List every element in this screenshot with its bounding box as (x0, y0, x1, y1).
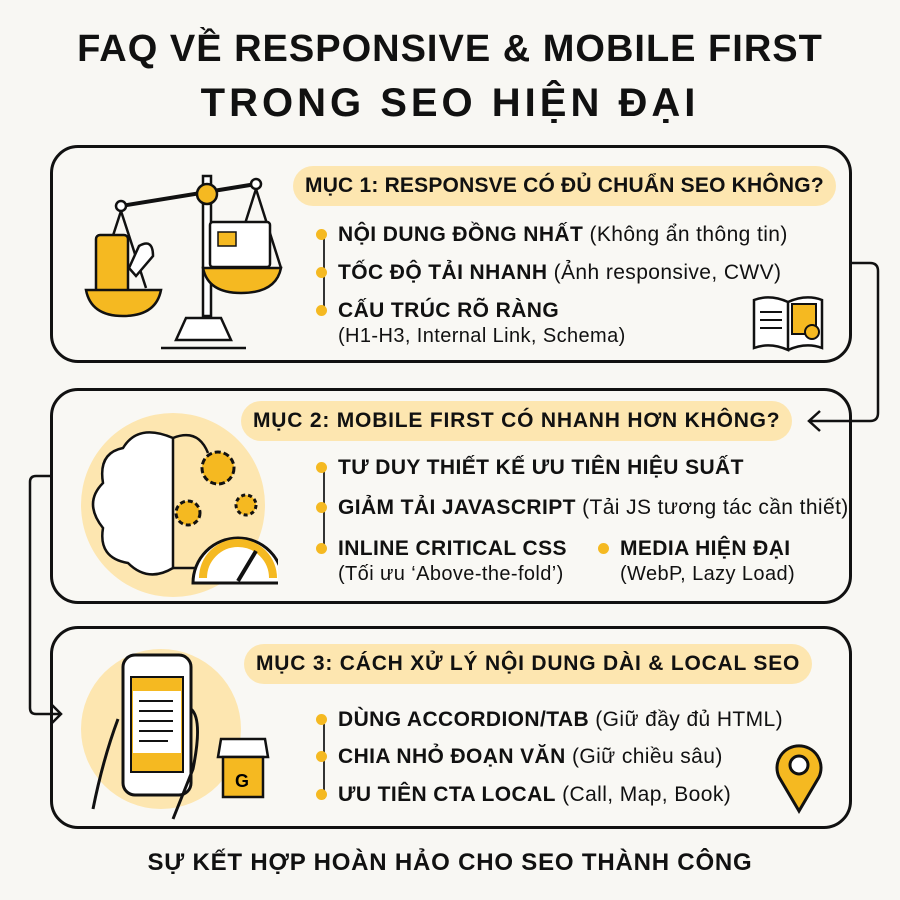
heading pill 2 (241, 401, 792, 441)
icon: map pin (776, 744, 822, 814)
icon: phone in hand with store (81, 649, 270, 820)
bullet 2.1: TƯ DUY THIẾT KẾ ƯU TIÊN HIỆU SUẤT (338, 456, 744, 479)
bullet 2.3 (316, 537, 567, 585)
arrow: panel 2 to panel 3 (28, 474, 63, 724)
icon: scale (84, 174, 282, 350)
panel: muc 2 (50, 388, 852, 604)
heading pill 1 (293, 166, 836, 206)
bullet 2.4: MEDIA HIỆN ĐẠI (620, 537, 790, 560)
bullet 1.3: (H1-H3, Internal Link, Schema) (338, 325, 626, 347)
panel: muc 3 (50, 626, 852, 829)
bullet 1.3: CẤU TRÚC RÕ RÀNG (338, 299, 559, 322)
bullet 2.4: (WebP, Lazy Load) (620, 563, 795, 585)
title: TRONG SEO HIỆN ĐẠI (201, 81, 699, 125)
bullet 1.3 (316, 298, 626, 347)
bullet 2.3: INLINE CRITICAL CSS (338, 537, 567, 560)
arrow: panel 1 to panel 2 (807, 262, 880, 432)
bullet 1.2: TỐC ĐỘ TẢI NHANH (Ảnh responsive, CWV) (338, 261, 781, 284)
heading pill 2: MỤC 2: MOBILE FIRST CÓ NHANH HƠN KHÔNG? (253, 409, 780, 432)
bullet 1.1: NỘI DUNG ĐỒNG NHẤT (Không ẩn thông tin) (338, 223, 788, 246)
title: FAQ VỀ RESPONSIVE & MOBILE FIRST (77, 28, 823, 70)
heading pill 3 (244, 644, 812, 684)
title (77, 27, 823, 125)
icon: book (752, 296, 824, 352)
bullet 3.3: ƯU TIÊN CTA LOCAL (Call, Map, Book) (338, 783, 731, 806)
bullet 3.2: CHIA NHỎ ĐOẠN VĂN (Giữ chiều sâu) (338, 745, 723, 768)
bullet 2.2: GIẢM TẢI JAVASCRIPT (Tải JS tương tác cần thiết) (338, 496, 849, 519)
footer: SỰ KẾT HỢP HOÀN HẢO CHO SEO THÀNH CÔNG (147, 849, 753, 876)
bullet 3.1: DÙNG ACCORDION/TAB (Giữ đầy đủ HTML) (338, 708, 783, 731)
icon: brain with gears and gauge (81, 413, 278, 597)
bullet 2.3: (Tối ưu ‘Above-the-fold’) (338, 563, 564, 585)
panel: muc 1 (50, 145, 852, 363)
bullet 2.4 (598, 536, 795, 585)
heading pill 1: MỤC 1: RESPONSVE CÓ ĐỦ CHUẨN SEO KHÔNG? (305, 174, 824, 197)
icon: phone in hand with store: G (235, 771, 249, 791)
heading pill 3: MỤC 3: CÁCH XỬ LÝ NỘI DUNG DÀI & LOCAL SEO (256, 652, 800, 675)
